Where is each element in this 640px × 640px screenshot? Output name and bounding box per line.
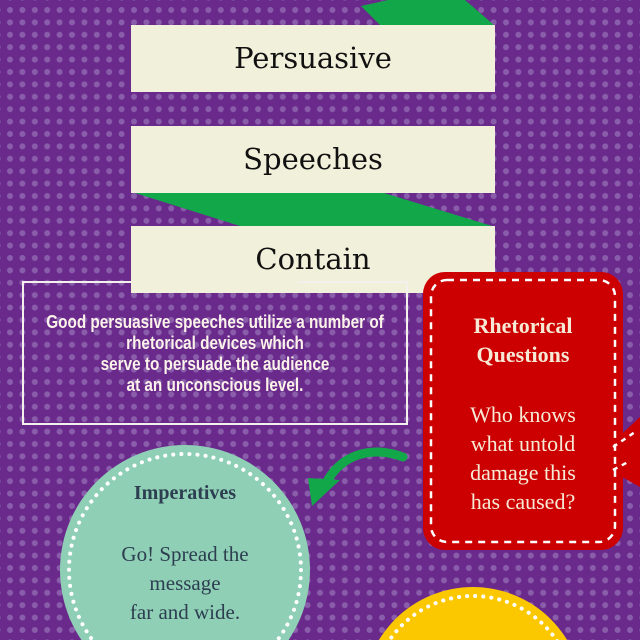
panel: rhetorical questions speech bubble: has caused? <box>471 489 575 514</box>
panel: imperatives circle: message <box>149 571 221 595</box>
panel: imperatives circle: Go! Spread the <box>121 542 249 566</box>
panel: rhetorical questions speech bubble: damage this <box>470 460 576 485</box>
intro text box: rhetorical devices which <box>126 333 304 353</box>
panel: rhetorical questions speech bubble: Rhetorical <box>474 313 572 338</box>
title box: Contain <box>131 226 495 293</box>
intro text box <box>22 281 408 425</box>
ribbon green middle <box>135 193 492 226</box>
panel: rhetorical questions speech bubble <box>423 272 640 550</box>
title box: Contain: Contain <box>255 242 371 276</box>
panel: imperatives circle: far and wide. <box>130 600 240 624</box>
panel: rhetorical questions speech bubble: Who knows <box>470 402 576 427</box>
panel: imperatives circle <box>60 445 310 640</box>
intro text box: Good persuasive speeches utilize a number of <box>46 312 384 332</box>
intro text box: serve to persuade the audience <box>101 354 329 374</box>
title box: Speeches <box>131 126 495 193</box>
title box: Speeches: Speeches <box>243 142 383 176</box>
panel: rhetorical questions speech bubble: what untold <box>471 431 575 456</box>
panel: imperatives circle: Imperatives <box>134 482 236 504</box>
panel: yellow circle <box>379 587 567 640</box>
arrow: green curved <box>308 448 408 506</box>
ribbon green top <box>135 0 494 226</box>
title box: Persuasive <box>131 25 495 92</box>
intro text box: at an unconscious level. <box>127 375 303 395</box>
panel: rhetorical questions speech bubble: Questions <box>477 342 569 367</box>
title box: Persuasive: Persuasive <box>234 41 392 75</box>
